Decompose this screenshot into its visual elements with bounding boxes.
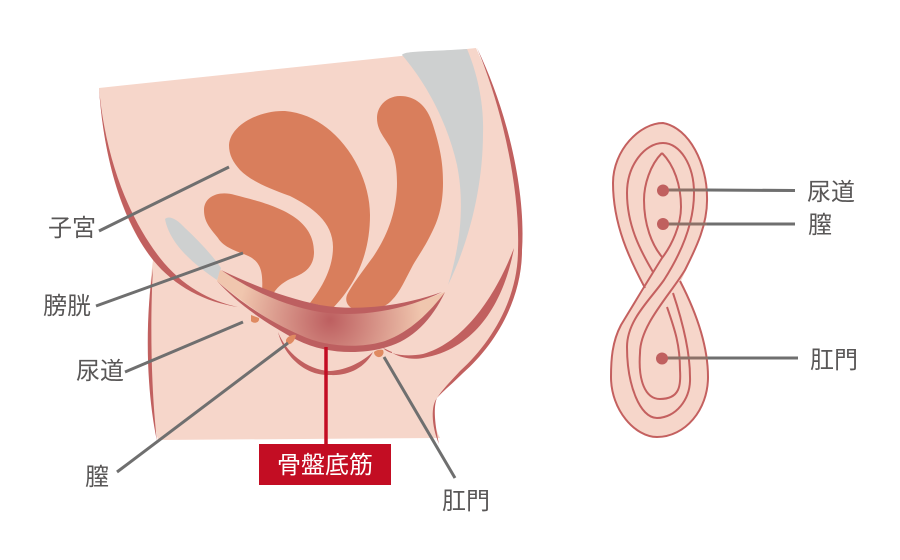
figure-eight fill — [611, 123, 708, 437]
body outline strokes — [99, 48, 523, 444]
label: anus: 肛門 — [442, 488, 490, 515]
label: urethra: 尿道 — [76, 358, 124, 385]
leader lines: cross-section — [96, 167, 455, 478]
label: vagina: 膣 — [85, 464, 109, 491]
label: uterus: 子宮 — [48, 215, 96, 242]
sacrum bone — [402, 49, 483, 285]
rectum — [346, 96, 443, 310]
label: anus (front view): 肛門 — [810, 347, 858, 374]
uterus — [229, 111, 370, 308]
panel: front view diagram — [611, 123, 798, 437]
panel: side cross-section — [99, 48, 523, 444]
bladder — [204, 193, 314, 296]
label: urethra (front view): 尿道 — [807, 179, 855, 206]
callout: pelvic floor muscle: 骨盤底筋 — [277, 452, 373, 479]
body silhouette — [99, 48, 522, 440]
openings: urethra, vagina, anus dots — [656, 184, 669, 364]
openings: urethra, vagina, anus — [251, 315, 384, 357]
leader line: pelvic floor muscle — [324, 347, 328, 445]
twisted ring outlines — [611, 123, 708, 437]
pelvic floor muscle — [217, 270, 445, 352]
label: vagina (front view): 膣 — [808, 212, 832, 239]
pubic bone — [165, 217, 221, 280]
callout: pelvic floor muscle — [259, 444, 391, 485]
label: bladder: 膀胱 — [43, 293, 91, 320]
pointer lines to labels — [662, 190, 798, 358]
